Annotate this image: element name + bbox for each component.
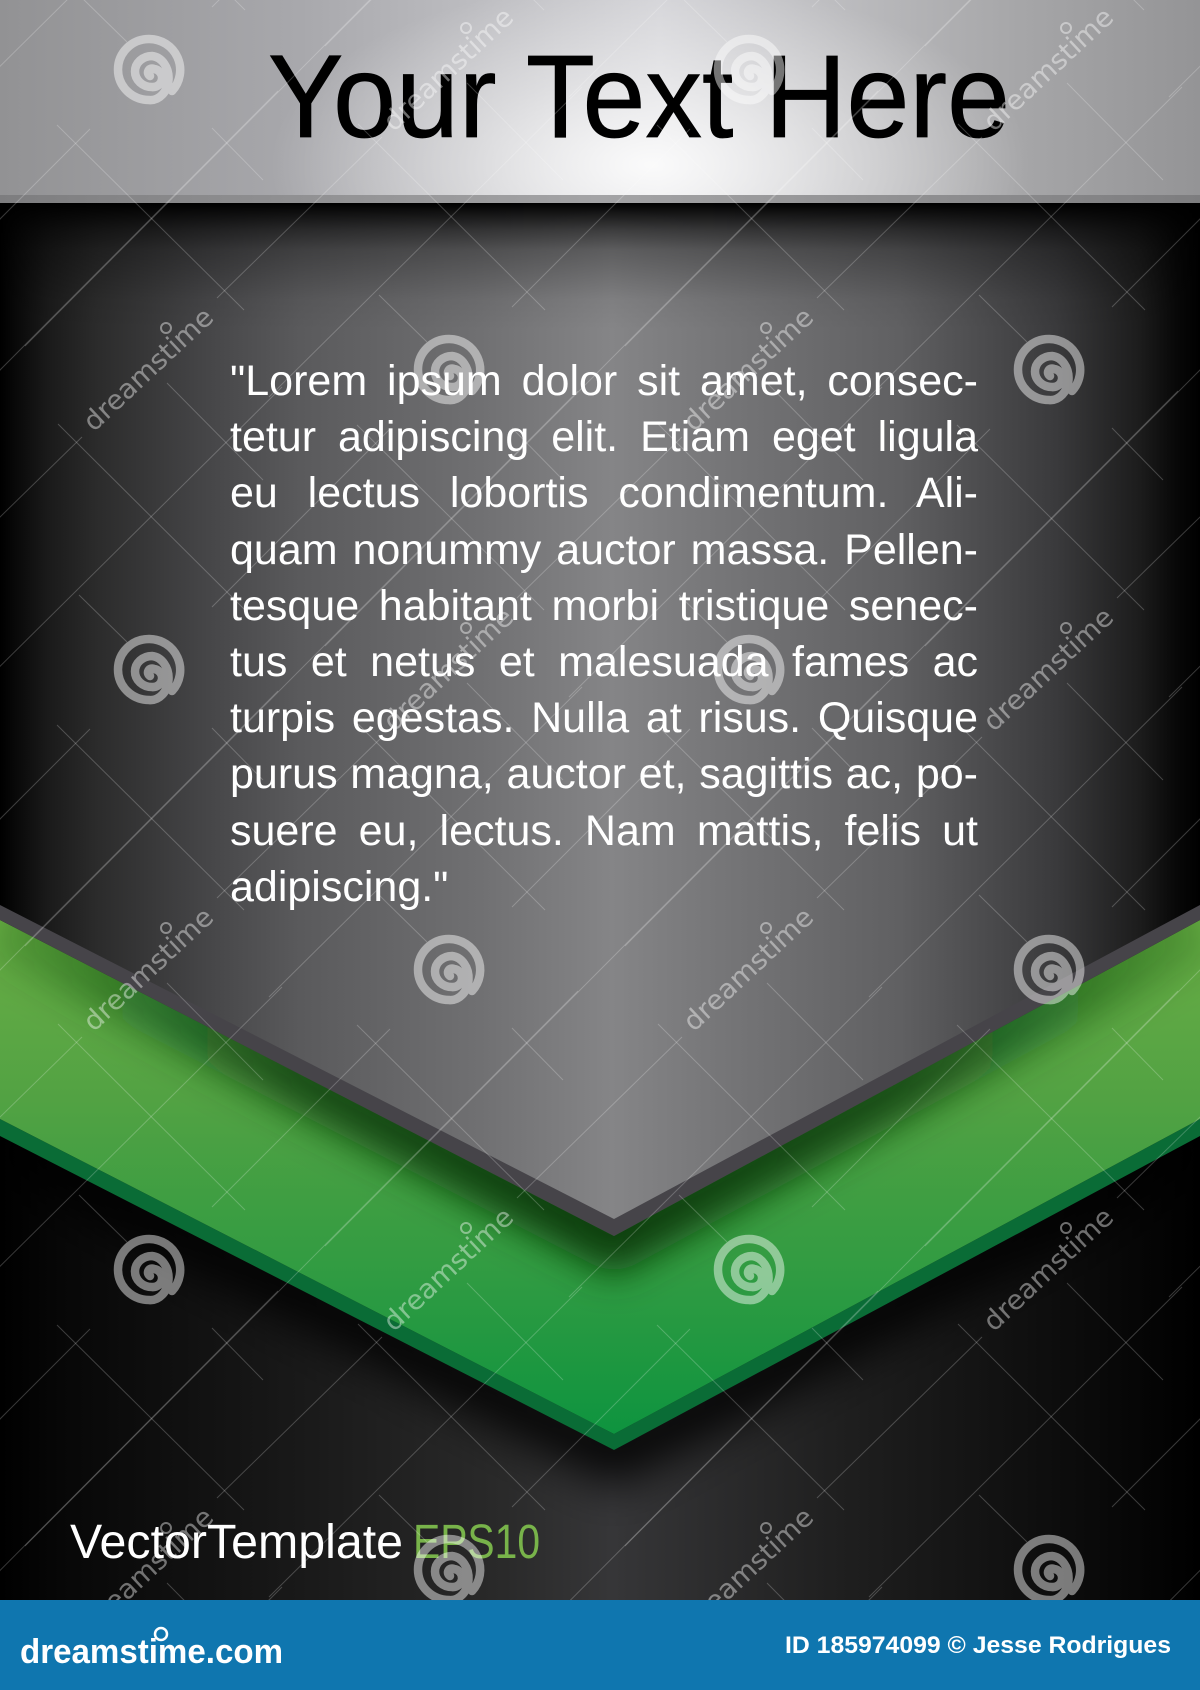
watermark: dreamstime wordmarks: dreamstime: [77, 302, 220, 438]
text block: lorem ipsum paragraph: [230, 357, 978, 911]
footer logo: dreamstime.com: dreamstime.com: [20, 1633, 283, 1671]
watermark: dreamstime wordmarks: dreamstime: [677, 1502, 820, 1638]
panel: silver header band: [0, 0, 1200, 203]
watermark: dreamstime wordmarks: dreamstime: [977, 2, 1120, 138]
text block: lorem ipsum paragraph: tesque habitant morbi tristique senec-: [230, 582, 978, 630]
text block: lorem ipsum paragraph: tus et netus et malesuada fames ac: [230, 638, 978, 686]
watermark: dreamstime wordmarks: dreamstime: [377, 1202, 520, 1338]
watermark: dreamstime wordmarks: dreamstime: [377, 602, 520, 738]
watermark: dreamstime wordmarks: dreamstime: [77, 1502, 220, 1638]
text block: lorem ipsum paragraph: adipiscing.": [230, 863, 448, 911]
panel: green chevron: [0, 920, 1200, 1450]
watermark: dreamstime wordmarks: dreamstime: [377, 2, 520, 138]
text block: lorem ipsum paragraph: purus magna, auctor et, sagittis ac, po-: [230, 750, 978, 798]
text block: lorem ipsum paragraph: eu lectus lobortis condimentum. Ali-: [230, 469, 978, 517]
panel: grey chevron with dark edge: [0, 203, 1200, 1236]
watermark: small copyright rings: [161, 23, 1071, 1533]
text block: lorem ipsum paragraph: tetur adipiscing elit. Etiam eget ligula: [230, 413, 978, 461]
footer: blue credit bar: [0, 1600, 1200, 1690]
caption: Vector Template EPS10: VectorTemplate: [70, 1516, 403, 1569]
text block: lorem ipsum paragraph: turpis egestas. Nulla at risus. Quisque: [230, 694, 978, 742]
watermark: dreamstime wordmarks: dreamstime: [77, 902, 220, 1038]
watermark: dreamstime wordmarks: dreamstime: [977, 1202, 1120, 1338]
title: Your Text Here: [268, 31, 1010, 163]
watermark: dreamstime wordmarks: dreamstime: [977, 602, 1120, 738]
panel: lower dark background: [74, 1217, 1114, 1600]
watermark: dreamstime wordmarks: dreamstime: [677, 302, 820, 438]
text block: lorem ipsum paragraph: "Lorem ipsum dolor sit amet, consec-: [230, 357, 978, 405]
watermark: dreamstime wordmarks: dreamstime: [677, 902, 820, 1038]
footer credit: image ID and author: ID 185974099 © Jesse Rodrigues: [785, 1632, 1171, 1659]
text block: lorem ipsum paragraph: suere eu, lectus. Nam mattis, felis ut: [230, 806, 978, 854]
text block: lorem ipsum paragraph: quam nonummy auctor massa. Pellen-: [230, 526, 978, 574]
caption: Vector Template EPS10: EPS10: [413, 1516, 540, 1569]
